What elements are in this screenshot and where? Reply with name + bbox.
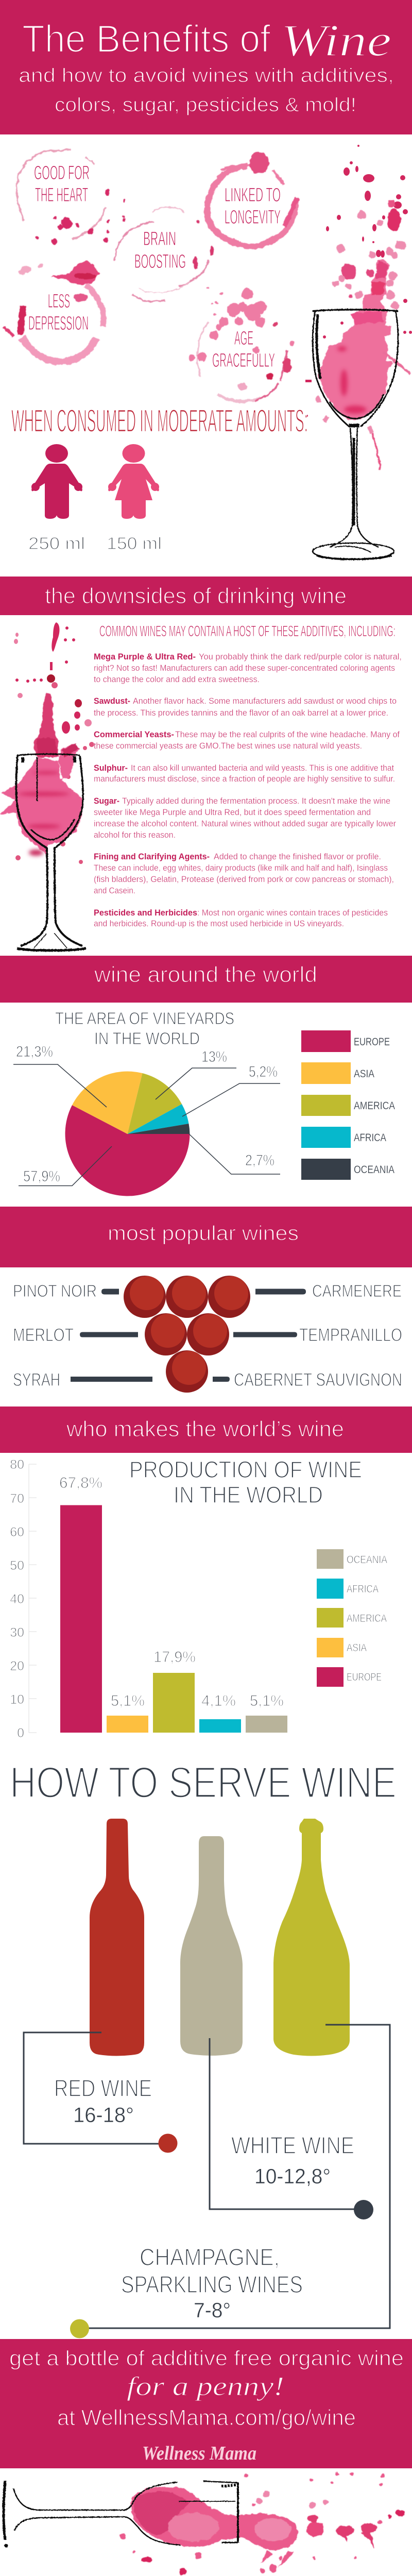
wine in left glass [0,692,82,854]
callout: white wine: WHITE WINE [231,2132,354,2159]
chart title: IN THE WORLD [174,1482,323,1508]
additive: pesticides: : Most non organic wines contain traces of pesticides [197,908,388,918]
panel: production bar chart [10,1456,387,1740]
bar value labels: 67,8% [59,1475,102,1492]
additive: commercial yeasts: These may be the real culprits of the wine headache. Many of [175,730,400,739]
illustration: wine glass with splash [305,145,412,560]
pie legend [301,1030,395,1180]
y axis: 80 [10,1458,24,1472]
y axis: 70 [10,1492,24,1506]
callout: red wine [24,2032,177,2153]
additive: pesticides: Pesticides and Herbicides [94,908,197,918]
grape variety labels: PINOT NOIR [13,1281,97,1300]
url line: at WellnessMama.com/go/wine [57,2405,356,2430]
ring: brain boosting [114,207,214,301]
pie value labels: 13% [201,1048,227,1065]
glass outline [313,310,398,560]
pie value labels: 21,3% [16,1043,53,1060]
chart title: IN THE WORLD [94,1029,200,1048]
pie value labels: 2,7% [245,1152,274,1169]
benefit labels: BRAIN [143,228,176,250]
bar value labels: 5,1% [250,1692,284,1709]
panel: vineyards pie chart [13,1009,395,1196]
pale splash blobs [332,199,406,309]
y axis: 20 [10,1659,24,1673]
additive: mega purple [94,652,402,684]
pie value labels: 57,9% [23,1168,60,1185]
grape variety labels: SYRAH [13,1370,60,1390]
additive: sugar: sweeter like Mega Purple and Ultra Red, but it does speed fermentation and [94,807,371,817]
bar legend: AMERICA [347,1613,387,1624]
subtitle [19,65,394,116]
pie chart [65,1071,190,1196]
subtitle: colors, sugar, pesticides & mold! [55,94,356,116]
pie legend: OCEANIA [354,1164,394,1176]
benefit labels: BOOSTING [134,251,186,273]
ring: linked to longevity [207,152,297,246]
additive: sugar: alcohol for this reason. [94,830,176,840]
additive: commercial yeasts: these commercial yeasts are GMO.The best wines use natural wild yeasts. [94,741,362,751]
callout: champagne [70,2025,390,2338]
additive: sawdust [94,696,397,718]
subtitle: and how to avoid wines with additives, [19,65,394,87]
chart title [55,1009,234,1048]
grape variety labels: MERLOT [13,1325,74,1345]
pie value labels [16,1043,278,1185]
additive: mega purple: to change the color and add extra sweetness. [94,674,260,684]
additive: sugar [94,796,396,840]
title: The Benefits of [22,17,270,60]
title script word: Wine [281,16,391,66]
pie value labels: 5,2% [249,1063,278,1080]
icon: man 250 ml [28,444,85,553]
section band: who makes the world's wine: who makes the world’s wine [66,1417,344,1442]
bar legend: ASIA [347,1642,367,1654]
additive: sulphur: It can also kill unwanted bacteria and wild yeasts. This is one additive that [131,763,394,773]
bars [60,1505,287,1733]
y axis: 10 [10,1692,24,1707]
bottle: red wine [90,1819,144,2056]
section band: downsides [0,577,412,615]
call to action panel [0,2339,412,2468]
additive: sulphur [94,763,395,784]
glass outline [16,754,86,951]
benefit labels: THE HEART [35,184,88,206]
chart title [129,1456,362,1508]
additive: fining agents: Added to change the finished flavor or profile. [214,852,381,861]
benefit labels: GRACEFULLY [212,350,275,371]
additive: fining agents [94,852,394,895]
label: 150 ml: 150 ml [107,534,162,553]
additive: sulphur: manufacturers must disclose, since a fraction of people are highly sensitive to sulfur. [94,774,395,784]
benefit labels: LONGEVITY [225,207,281,228]
y axis [10,1458,37,1740]
section band: most popular wines [0,1207,412,1267]
y axis: 40 [10,1592,24,1606]
section band: downsides: the downsides of drinking wine [45,584,347,608]
panel: popular wines grape cluster [13,1276,402,1393]
additive: sugar: increase the alcohol content. Natural wines without added sugar are typically lower [94,819,396,828]
additive: commercial yeasts: Commercial Yeasts- [94,730,174,739]
callout: red wine: RED WINE [54,2075,152,2102]
callout: champagne: CHAMPAGNE, [140,2244,280,2270]
wine column and bowl [317,259,410,470]
y axis: 30 [10,1625,24,1640]
section band: wine around the world [0,956,412,1003]
chart title: PRODUCTION OF WINE [129,1456,362,1483]
pie legend: AMERICA [354,1100,395,1112]
section band: wine around the world: wine around the world [94,962,317,987]
bar value labels: 5,1% [111,1692,145,1709]
additive: pesticides: and herbicides. Round-up is the most used herbicide in US vineyards. [94,919,344,928]
header panel [0,0,412,134]
additive: mega purple: Mega Purple & Ultra Red- [94,652,196,662]
additive: sulphur: Sulphur- [94,763,128,773]
pie legend: EUROPE [354,1036,390,1048]
logo: Wellness Mama: Wellness Mama [142,2443,256,2464]
bar legend: EUROPE [347,1671,382,1683]
additive: fining agents: Fining and Clarifying Agents- [94,852,210,861]
illustration: spilled wine glass [4,2472,405,2575]
ring: good for the heart [16,149,125,245]
pie legend: AFRICA [354,1132,386,1144]
y axis: 0 [17,1726,24,1740]
icon: woman 150 ml [107,444,162,553]
spilled wine [119,2472,405,2575]
panel: additives list [94,623,402,928]
benefit labels: LINKED TO [225,184,281,206]
additive: fining agents: These can include, egg whites, dairy products (like milk and half and half), Isinglass [94,863,388,873]
section band: most popular wines: most popular wines [108,1222,299,1245]
additive: fining agents: and Casein. [94,886,135,895]
bar value labels: 4,1% [201,1692,236,1709]
wine splash droplets [305,145,412,417]
grape variety labels [13,1281,402,1390]
callout: champagne: SPARKLING WINES [121,2271,303,2298]
illustration: left wine glass [0,622,94,951]
y axis: 60 [10,1525,24,1539]
script line: for a penny! [127,2372,284,2401]
callout: white wine [210,2038,373,2219]
additive: mega purple: You probably think the dark red/purple color is natural, [199,652,402,662]
benefits panel: wine stain rings [4,149,297,401]
grape cluster [124,1276,250,1393]
bar legend [317,1549,387,1687]
additive: sugar: Sugar- [94,796,119,806]
benefit labels [28,162,281,371]
benefit labels: AGE [234,328,253,349]
callout: white wine: 10-12,8° [254,2164,331,2188]
callout: red wine: 16-18° [73,2103,134,2127]
bar legend: OCEANIA [347,1554,387,1566]
panel: how to serve wine [10,1758,397,2338]
bar value labels: 17,9% [153,1649,196,1666]
benefit labels: LESS [48,291,70,312]
additive: mega purple: right? Not so fast! Manufacturers can add these super-concentrated coloring agents [94,663,395,673]
additive: sawdust: the process. This provides tannins and the flavor of an oak barrel at a lower price. [94,708,388,718]
benefit labels: GOOD FOR [34,162,90,184]
connector bars [71,1289,306,1382]
section band: who makes the world's wine [0,1406,412,1453]
additive: sawdust: Sawdust- [94,696,130,706]
label: 250 ml: 250 ml [28,534,85,553]
ring: less depression [4,261,104,362]
bar value labels [59,1475,284,1709]
glass outline [4,2481,238,2547]
additive: commercial yeasts [94,730,400,751]
y axis: 50 [10,1558,24,1573]
benefit labels: DEPRESSION [28,313,89,334]
pie leader lines [13,1064,280,1186]
additive: fining agents: (fish bladders), Gelatin, Protease (derived from pork or cow pancreas or stomach), [94,874,394,884]
bottle: white wine [180,1836,243,2056]
ring: age gracefully [188,287,295,401]
callout: champagne: 7-8° [194,2298,231,2322]
additive: sugar: Typically added during the fermentation process. It doesn't make the wine [122,796,390,806]
chart title: THE AREA OF VINEYARDS [55,1009,234,1028]
additive: pesticides [94,908,388,928]
bar legend: AFRICA [347,1583,379,1595]
pie legend: ASIA [354,1068,374,1080]
additive: sawdust: Another flavor hack. Some manufacturers add sawdust or wood chips to [133,696,397,706]
offer line: get a bottle of additive free organic wine [9,2346,404,2370]
bottle: champagne [273,1819,350,2056]
